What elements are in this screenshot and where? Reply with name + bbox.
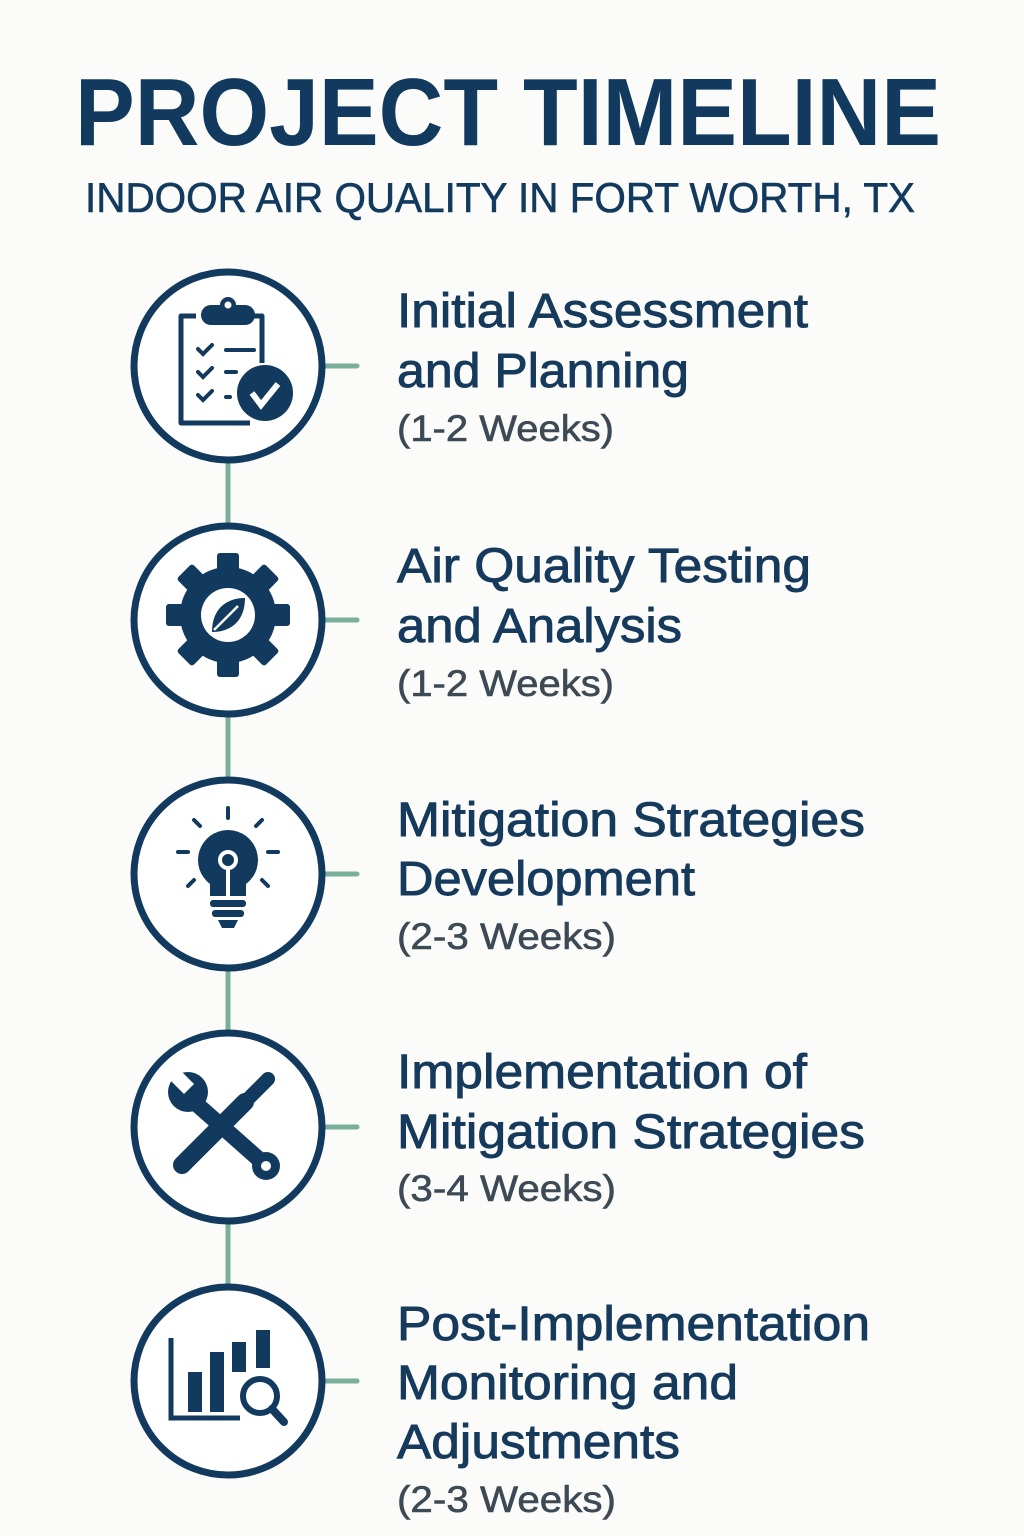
step 3: mitigation development [134, 780, 865, 968]
step 5 text [397, 1298, 870, 1520]
subtitle: INDOOR AIR QUALITY IN FORT WORTH, TX [85, 174, 915, 221]
step 3 text [397, 794, 865, 957]
title: PROJECT TIMELINE [75, 59, 941, 166]
step 2: testing [134, 526, 811, 714]
step 5: monitoring [134, 1287, 870, 1520]
step 3 text: Development [397, 853, 695, 906]
icon: light bulb [134, 780, 322, 968]
step 2 text: (1-2 Weeks) [397, 663, 614, 704]
step 4 text: (3-4 Weeks) [397, 1168, 616, 1209]
step 5 text: Monitoring and [397, 1357, 738, 1410]
step 5 text: Adjustments [397, 1416, 680, 1469]
step 1 text [397, 285, 808, 449]
step 1 text: Initial Assessment [397, 285, 808, 338]
timeline connector [228, 366, 357, 1381]
step 2 text: Air Quality Testing [397, 540, 811, 593]
step 4: implementation [134, 1033, 865, 1221]
step 4 text: Implementation of [397, 1046, 808, 1099]
step 5 text: Post-Implementation [397, 1298, 870, 1351]
step 1: initial assessment [134, 272, 808, 460]
step 4 text [397, 1046, 865, 1209]
step 3 text: (2-3 Weeks) [397, 916, 616, 957]
icon: bar chart with magnifier [134, 1287, 322, 1475]
icon: clipboard [134, 272, 322, 460]
step 1 text: (1-2 Weeks) [397, 408, 614, 449]
step 2 text: and Analysis [397, 600, 682, 653]
icon: wrench and screwdriver [134, 1033, 322, 1221]
step 4 text: Mitigation Strategies [397, 1106, 865, 1159]
step 5 text: (2-3 Weeks) [397, 1479, 616, 1520]
step 2 text [397, 540, 811, 704]
step 1 text: and Planning [397, 345, 689, 398]
icon: gear with leaf [134, 526, 322, 714]
step 3 text: Mitigation Strategies [397, 794, 865, 847]
